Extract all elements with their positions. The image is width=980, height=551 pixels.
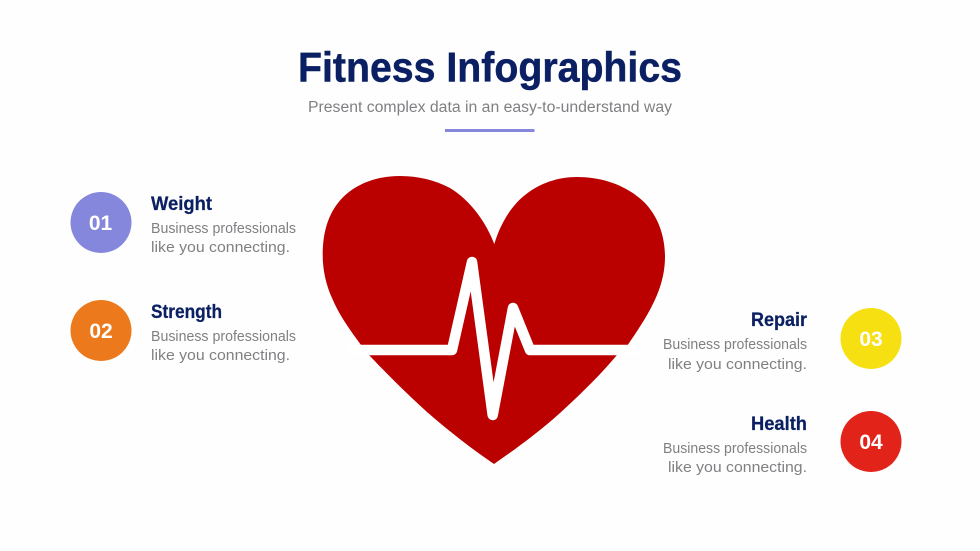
number badge 02 [70,300,132,361]
title: Fitness Infographics [298,44,682,90]
icon: heart [323,176,665,464]
description: Strength: Business professionals [151,328,296,345]
number badge 03 [840,308,902,369]
heart with heartbeat line [323,176,665,464]
number badge 04: 04 [859,431,883,454]
item 04: Health [663,411,902,476]
number badge 01 [70,192,132,253]
number badge 02: 02 [89,320,113,343]
item 03: Repair [663,308,902,373]
description: Repair: like you connecting. [668,356,807,373]
title underline accent [445,129,534,132]
description: Strength: like you connecting. [151,347,290,364]
heading: Strength: Strength [151,302,222,323]
description: Weight: like you connecting. [151,239,290,256]
heading: Repair: Repair [751,310,808,331]
number badge 01: 01 [89,212,112,235]
description: Weight: Business professionals [151,220,296,237]
item 01: Weight [70,192,296,256]
number badge 04 [840,411,902,472]
heading: Weight: Weight [151,194,213,215]
heading: Health: Health [751,414,807,435]
description: Health: like you connecting. [668,459,807,476]
description: Weight [151,220,296,256]
icon: heartbeat pulse line [352,262,636,415]
description: Strength [151,328,296,364]
description: Health [663,440,807,476]
subtitle: Present complex data in an easy-to-understand way [308,99,672,116]
number badge 03: 03 [859,328,883,351]
description: Repair [663,336,807,373]
item 02: Strength [70,300,296,364]
description: Repair: Business professionals [663,336,807,353]
description: Health: Business professionals [663,440,807,457]
